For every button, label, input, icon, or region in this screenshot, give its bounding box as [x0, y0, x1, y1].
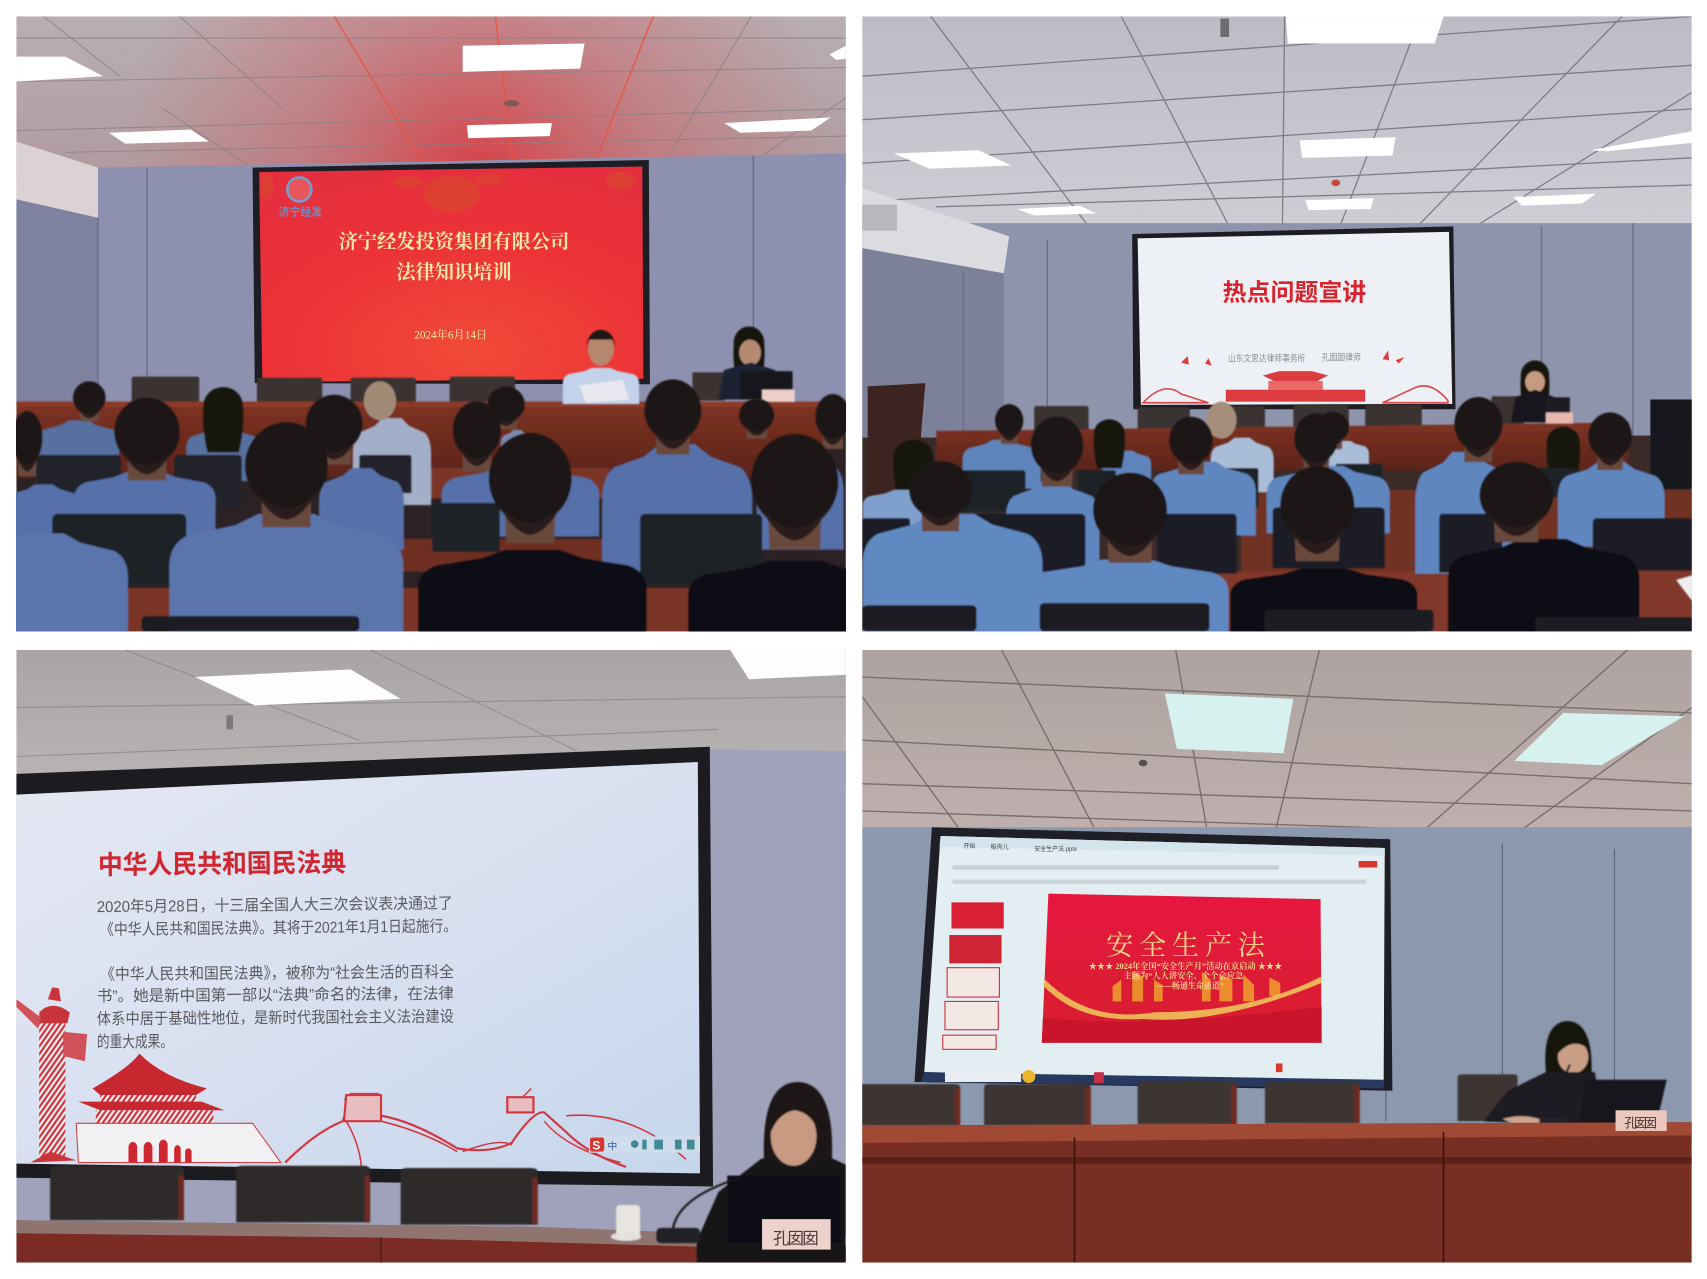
panel: photo of work-safety law slide with lecturer: [855, 650, 1692, 1263]
white ceiling: [862, 16, 1695, 239]
chairs: [50, 1166, 538, 1225]
software toolbar: [953, 842, 1377, 884]
dark room base behind audience: [16, 414, 846, 631]
podium, chairs and presenters: [16, 326, 827, 478]
panel: photo of Civil Code slide with lecturer: [16, 649, 846, 1263]
LED screen with title: [253, 160, 650, 384]
LED screen showing presentation software: [914, 827, 1392, 1091]
slide paragraphs: 的重大成果。: [97, 1033, 173, 1051]
main red slide with title: 主题为“人人讲安全、个个会应急: [1123, 970, 1244, 981]
screen title: 济宁经发投资集团有限公司: [339, 230, 569, 253]
slide paragraphs: 体系中居于基础性地位，是新时代我国社会主义法治建设: [97, 1008, 454, 1028]
slide presenter caption: [1228, 352, 1360, 362]
name card: [762, 1219, 831, 1250]
table: [16, 1220, 846, 1263]
audience in blue uniforms: [16, 378, 846, 632]
software toolbar: 开始: [963, 842, 975, 850]
LED screen frame: [16, 747, 713, 1186]
screen title: 2024年6月14日: [414, 328, 487, 342]
input method toolbar: [589, 1136, 700, 1153]
slide presenter caption: 山东文思达律师事务所: [1228, 352, 1305, 363]
input method toolbar: S: [592, 1138, 600, 1152]
LED screen content: [16, 762, 700, 1173]
screen title: 法律知识培训: [396, 262, 512, 284]
red Tiananmen gate illustration: [76, 1054, 281, 1163]
slide paragraphs: 2020年5月28日，十三届全国人大三次会议表决通过了: [97, 894, 453, 916]
windows taskbar: [921, 1063, 1384, 1089]
ceiling with red glow: [16, 16, 846, 180]
slide paragraphs: 《中华人民共和国民法典》。其将于2021年1月1日起施行。: [100, 917, 457, 939]
slide presenter caption: 孔囡囡律师: [1322, 351, 1361, 362]
wall: [862, 827, 1692, 1143]
slide red landmark illustration: [1143, 351, 1448, 403]
name card: 孔囡囡: [1624, 1116, 1657, 1131]
table: [862, 1122, 1692, 1263]
panel: photo of lecturer with hot-issues slide: [862, 16, 1698, 636]
name card: 孔囡囡: [773, 1230, 819, 1248]
projection screen with slide title: 热点问题宣讲: [1223, 279, 1366, 306]
audience in blue uniforms: [862, 397, 1698, 636]
red huabiao column illustration: [16, 987, 87, 1163]
company logo: [279, 177, 322, 219]
decorative flowers on screen: [260, 172, 636, 212]
red Great Wall illustration: [285, 1089, 686, 1167]
input method toolbar: 中: [607, 1139, 617, 1152]
name card: [1616, 1110, 1667, 1131]
main red slide with title: 安全生产法: [1106, 931, 1266, 961]
projection screen with slide title: [1132, 226, 1456, 409]
wall and air-vent soffit: [862, 188, 1695, 512]
wall: [16, 142, 846, 414]
lecturer with laptop: [1483, 1021, 1667, 1133]
panel: photo of training opening with red screen: [0, 16, 901, 642]
dark room base behind audience: [862, 435, 1692, 631]
slide thumbnails: [943, 902, 1004, 1049]
main red slide with title: ★★★ 2024年全国“安全生产月”活动在京启动 ★★★: [1089, 960, 1283, 971]
slide paragraphs: [97, 894, 457, 1051]
slide title: 中华人民共和国民法典: [98, 847, 346, 880]
main red slide with title: [1042, 894, 1322, 1043]
rear table, chairs and lecturer: [936, 360, 1629, 470]
slide paragraphs: 《中华人民共和国民法典》，被称为“社会生活的百科全: [100, 963, 454, 984]
chairs: [855, 1074, 1518, 1126]
ceiling: [862, 650, 1692, 844]
main red slide with title: ——畅通生命通道”: [1155, 979, 1224, 990]
ceiling: [16, 649, 846, 1235]
screen title: [339, 230, 569, 342]
slide paragraphs: 书”。她是新中国第一部以“法典”命名的法律，在法律: [97, 985, 454, 1005]
company logo: 济宁经发: [279, 205, 322, 219]
lecturer with laptop and name card: [611, 1082, 846, 1263]
software toolbar: 稻壳儿: [991, 843, 1009, 851]
software toolbar: 安全生产法.pptx: [1034, 845, 1077, 853]
